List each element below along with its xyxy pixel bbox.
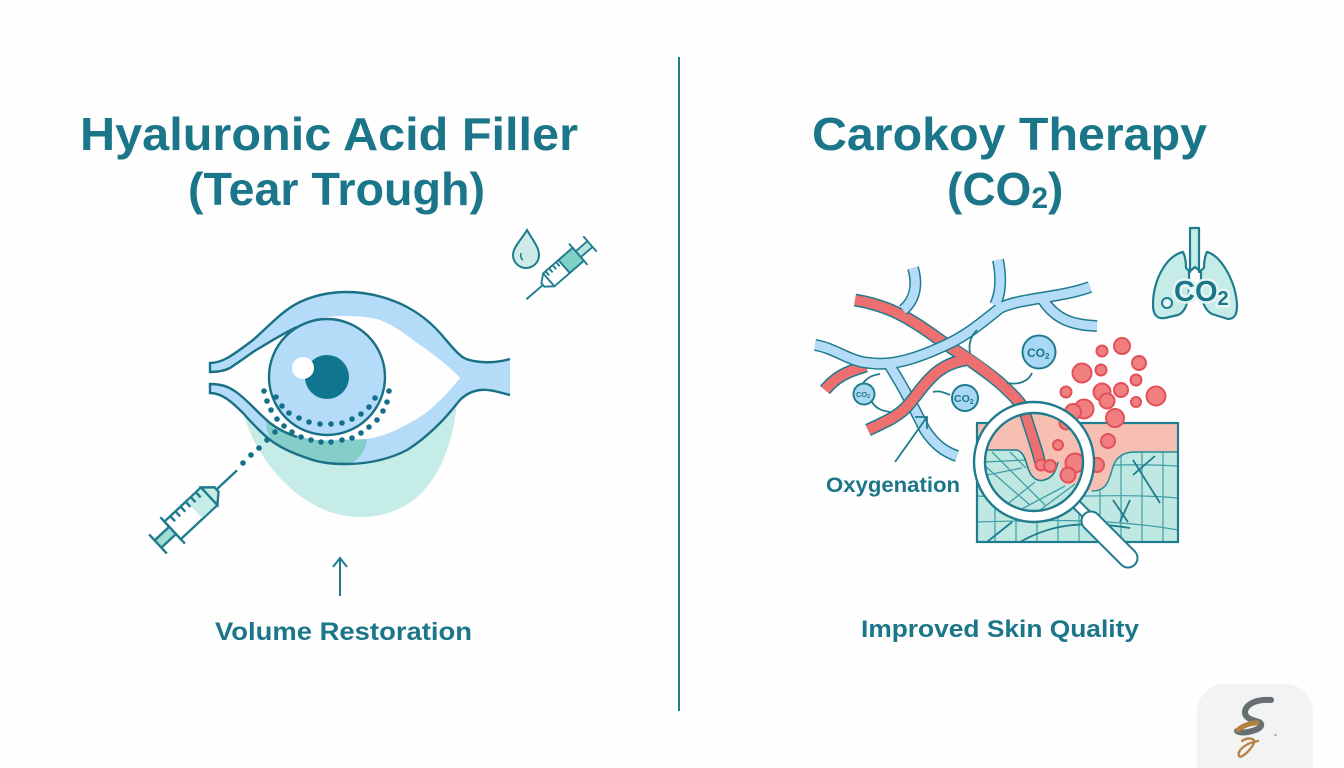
CO2 bubble large: 2 — [1045, 352, 1050, 361]
eyelids — [210, 292, 510, 464]
panel: carboxy therapy — [812, 108, 1237, 643]
blue vessels — [815, 260, 1097, 456]
icon: water drop — [513, 230, 539, 268]
CO2 bubble medium — [952, 385, 978, 411]
heading: hyaluronic acid filler — [80, 108, 578, 215]
heading: carokoy therapy — [812, 108, 1207, 215]
panel: hyaluronic acid filler — [80, 108, 599, 646]
under-eye volume — [243, 403, 457, 517]
divider — [678, 57, 680, 711]
heading: hyaluronic acid filler: Hyaluronic Acid Filler — [80, 108, 578, 160]
lens ring — [980, 408, 1088, 516]
CO2 bubble medium: CO — [954, 393, 970, 405]
icon: lungs: 2 — [1218, 288, 1229, 310]
illustration: blood vessels — [815, 260, 1097, 456]
CO2 bubble large: CO — [1027, 346, 1045, 360]
icon: lungs: CO — [1174, 276, 1218, 308]
icon: magnifying glass — [974, 402, 1128, 558]
illustration: red bubbles — [1060, 338, 1166, 472]
CO2 bubble small: CO — [856, 390, 867, 399]
heading: carokoy therapy: ) — [1048, 163, 1063, 215]
arrow: up to volume — [333, 558, 347, 596]
pink dermis — [977, 423, 1178, 491]
connectors — [863, 330, 1032, 412]
iris — [269, 319, 385, 435]
label: volume restoration: Volume Restoration — [215, 618, 472, 646]
heading: hyaluronic acid filler: (Tear Trough) — [188, 163, 485, 215]
label: oxygenation: Oxygenation — [826, 474, 960, 497]
lens contents — [985, 413, 1086, 511]
pupil — [305, 355, 349, 399]
heading: carokoy therapy: Carokoy Therapy — [812, 108, 1207, 160]
highlight — [292, 357, 314, 379]
CO2 bubble medium: 2 — [970, 399, 974, 406]
icon: eye — [210, 292, 510, 517]
arrow: oxygenation — [895, 417, 927, 462]
CO2 bubble small: 2 — [867, 394, 870, 400]
illustration: skin cross-section — [977, 423, 1178, 542]
lid outlines — [210, 292, 510, 464]
handle — [1077, 505, 1092, 520]
logo badge — [1197, 684, 1313, 768]
red vessel crossing — [868, 350, 1026, 430]
injection dots — [240, 388, 392, 466]
heading: carokoy therapy: 2 — [1031, 182, 1048, 215]
icon: large syringe — [146, 457, 249, 557]
CO2 bubble large — [1022, 336, 1056, 368]
icon: lungs — [1153, 228, 1237, 319]
label: improved skin quality: Improved Skin Quality — [861, 616, 1140, 643]
icon: small syringe — [517, 233, 599, 310]
red vessels — [825, 300, 1026, 412]
CO2 bubble small — [854, 384, 874, 404]
dark filler overlap — [266, 420, 367, 463]
heading: carokoy therapy: (CO — [947, 163, 1031, 215]
